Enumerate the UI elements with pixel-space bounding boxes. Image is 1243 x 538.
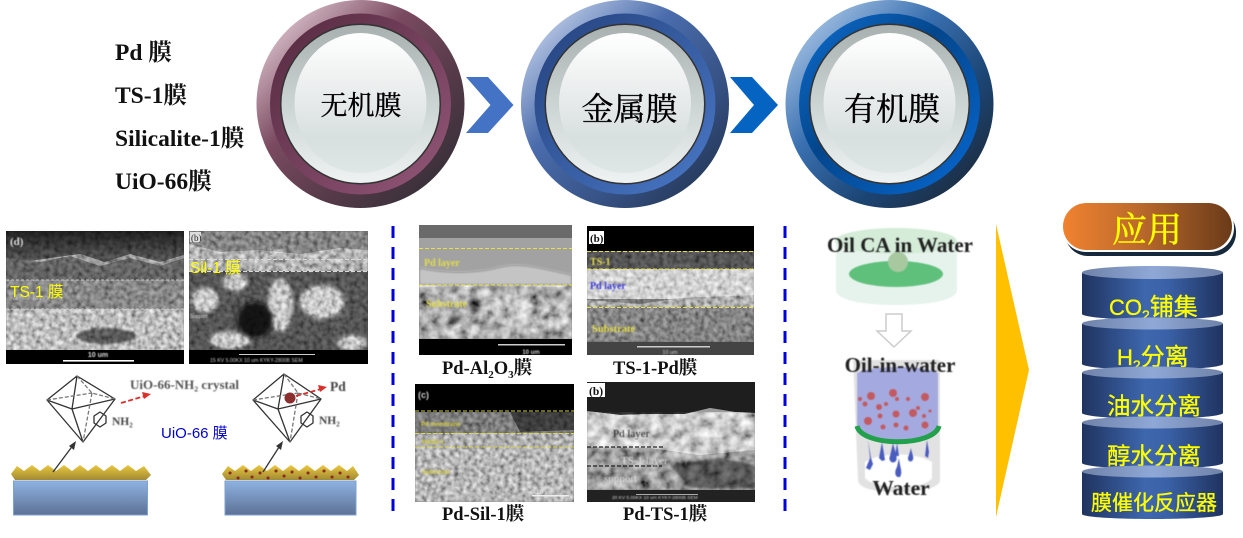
SEM image: Pd-Al2O3 bbox=[419, 225, 572, 356]
diagram: UiO-66-NH2 crystal on substrate bbox=[11, 376, 239, 515]
diagram: Pd loaded UiO-66 crystal on substrate bbox=[222, 374, 359, 515]
caption: TS-1-Pd: TS-1-Pd膜 bbox=[613, 358, 697, 379]
growth arrow bbox=[53, 441, 76, 472]
SEM image: TS-1-Pd: TS-1 bbox=[590, 257, 611, 268]
green membrane ring bbox=[857, 426, 939, 442]
arrow: chevron 1 bbox=[466, 77, 514, 133]
heading: oil-in-water: Oil-in-water bbox=[845, 353, 955, 377]
SEM image: Silicalite-1 membrane: 15 KV 5.00KX 10 um KYKY-2800B SEM bbox=[210, 358, 303, 364]
tier: membrane catalytic reactor: 膜催化反应器 bbox=[1091, 492, 1217, 515]
tier: alcohol-water separation bbox=[1082, 416, 1223, 469]
circle: organic membrane: 有机膜 bbox=[844, 91, 940, 127]
heading: applications pill bbox=[1062, 203, 1236, 256]
tier: CO2 capture bbox=[1082, 266, 1223, 323]
caption: Pd-Al2O3: 3 bbox=[508, 369, 514, 381]
Pd particle bbox=[284, 392, 296, 404]
caption: Pd-Al2O3: 膜 bbox=[514, 358, 532, 379]
amine label: NH₂ bbox=[112, 416, 133, 428]
cup bbox=[853, 360, 940, 492]
arrow: large yellow triangle bbox=[996, 224, 1029, 517]
circle: inorganic membrane: 无机膜 bbox=[320, 91, 402, 121]
SEM image: TS-1-Pd: Substrate bbox=[592, 324, 636, 335]
SEM image: Pd-TS-1: support bbox=[604, 473, 637, 485]
divider: right bbox=[784, 226, 786, 511]
tier: H2 separation bbox=[1082, 318, 1223, 373]
tier: oil-water separation bbox=[1082, 366, 1223, 419]
amine label: NH₂ bbox=[319, 415, 340, 427]
SEM image: Pd-TS-1: (b) bbox=[589, 386, 603, 398]
label: water: Water bbox=[872, 476, 930, 500]
SEM image: Pd-Al2O3: Pd layer bbox=[424, 258, 460, 269]
SEM image: TS-1-Pd bbox=[587, 226, 754, 356]
SEM image: Silicalite-1 membrane: Support bbox=[190, 314, 208, 320]
SEM image: Pd-Al2O3: 10 um bbox=[522, 350, 540, 356]
Pd label: Pd bbox=[330, 379, 346, 394]
circle: organic membrane bbox=[786, 0, 994, 208]
tier: CO2 capture: 铺集 bbox=[1150, 294, 1198, 321]
label: Silicalite-1 membrane: Sil-1 膜 bbox=[190, 259, 241, 277]
divider: left bbox=[392, 226, 394, 511]
list item: Silicalite-1 membrane: Silicalite-1膜 bbox=[115, 125, 244, 152]
SEM image: Silicalite-1 membrane bbox=[189, 231, 368, 364]
label: TS-1 membrane: TS-1 膜 bbox=[10, 283, 63, 301]
tier: H2 separation: 分离 bbox=[1141, 344, 1189, 371]
SEM image: Pd-TS-1: 20 KV 5.00KX 10 um KYKY-2800B SEM bbox=[612, 495, 698, 501]
caption: Pd-Sil-1: Pd-Sil-1膜 bbox=[442, 504, 524, 525]
caption: Pd-Al2O3: Pd-Al bbox=[442, 359, 488, 379]
SEM image: Pd-TS-1 bbox=[587, 382, 755, 502]
SEM image: TS-1-Pd: 10 um bbox=[662, 350, 678, 356]
crystal layer bbox=[11, 465, 151, 480]
SEM image: Silicalite-1 membrane: (b) bbox=[191, 233, 202, 243]
SEM image: Pd-Sil-1 bbox=[415, 384, 574, 502]
arrow: chevron 2 bbox=[730, 77, 778, 133]
heading: oil CA in water: Oil CA in Water bbox=[827, 233, 973, 257]
octahedron bbox=[253, 374, 321, 442]
SEM image: Pd-Sil-1: (c) bbox=[418, 390, 429, 400]
diagram: oil contact angle in water bbox=[827, 228, 973, 305]
list item: Pd membrane: Pd 膜 bbox=[115, 39, 172, 66]
circle: metal membrane: 金属膜 bbox=[581, 91, 678, 127]
heading: applications pill: 应用 bbox=[1112, 211, 1182, 250]
SEM image: Pd-Sil-1: Substrate bbox=[422, 470, 450, 476]
water drops bbox=[866, 440, 929, 477]
list item: TS-1 membrane: TS-1膜 bbox=[115, 82, 187, 109]
SEM image: TS-1 membrane: (d) bbox=[10, 236, 24, 248]
tier: CO2 capture: 2 bbox=[1142, 307, 1150, 323]
tier: membrane catalytic reactor bbox=[1082, 466, 1223, 519]
circle: inorganic membrane bbox=[256, 0, 464, 208]
tier: alcohol-water separation: 醇水分离 bbox=[1107, 443, 1201, 469]
SEM image: TS-1-Pd: (b) bbox=[590, 233, 604, 245]
SEM image: Pd-Sil-1: 10 um bbox=[536, 489, 555, 496]
substrate bbox=[225, 481, 356, 515]
SEM image: TS-1-Pd: Pd layer bbox=[590, 281, 626, 292]
oil film bbox=[849, 261, 943, 287]
circle: metal membrane bbox=[521, 0, 729, 208]
tier: oil-water separation: 油水分离 bbox=[1107, 393, 1201, 419]
SEM image: Pd-TS-1: Pd layer bbox=[613, 428, 650, 440]
SEM image: TS-1 membrane: TS-1 layer bbox=[14, 293, 50, 302]
membrane type list bbox=[115, 39, 244, 195]
tier: H2 separation: H bbox=[1117, 345, 1133, 370]
SEM image: TS-1 membrane: 10 um bbox=[88, 352, 108, 359]
list item: UiO-66 membrane: UiO-66膜 bbox=[115, 168, 212, 195]
water dish bbox=[835, 228, 957, 305]
SEM image: Pd-Al2O3: Substrate bbox=[426, 299, 468, 310]
caption: Pd-Al2O3: 2 bbox=[488, 369, 494, 381]
oil droplets bbox=[858, 389, 932, 430]
oil droplet bbox=[888, 252, 908, 272]
SEM image: Pd-TS-1: TS-1 layer bbox=[621, 455, 668, 467]
red arrow bbox=[121, 392, 151, 403]
SEM image: Pd-Sil-1: Pd membrane bbox=[421, 422, 461, 428]
tier: H2 separation: 2 bbox=[1133, 357, 1141, 373]
label: UiO-66 membrane: UiO-66 膜 bbox=[161, 425, 228, 442]
crystal layer with Pd bbox=[222, 465, 359, 480]
SEM image: TS-1 membrane bbox=[6, 231, 184, 364]
diagram: oil-in-water separation cup bbox=[845, 353, 955, 500]
growth arrow bbox=[263, 441, 283, 472]
caption: Pd-Al2O3: O bbox=[494, 359, 508, 379]
tier: CO2 capture: CO bbox=[1109, 295, 1142, 320]
SEM image: Pd-Sil-1: Pd/Sil-1 bbox=[422, 440, 445, 446]
red arrow bbox=[296, 385, 327, 396]
octahedron bbox=[47, 376, 115, 442]
caption: Pd-TS-1: Pd-TS-1膜 bbox=[623, 504, 707, 525]
crystal label: UiO-66-NH₂ crystal bbox=[130, 377, 239, 392]
SEM image: Silicalite-1 membrane: 1 um bbox=[269, 249, 282, 255]
arrow: down outline bbox=[877, 314, 911, 347]
substrate bbox=[14, 481, 148, 515]
application stack bbox=[1082, 266, 1223, 519]
